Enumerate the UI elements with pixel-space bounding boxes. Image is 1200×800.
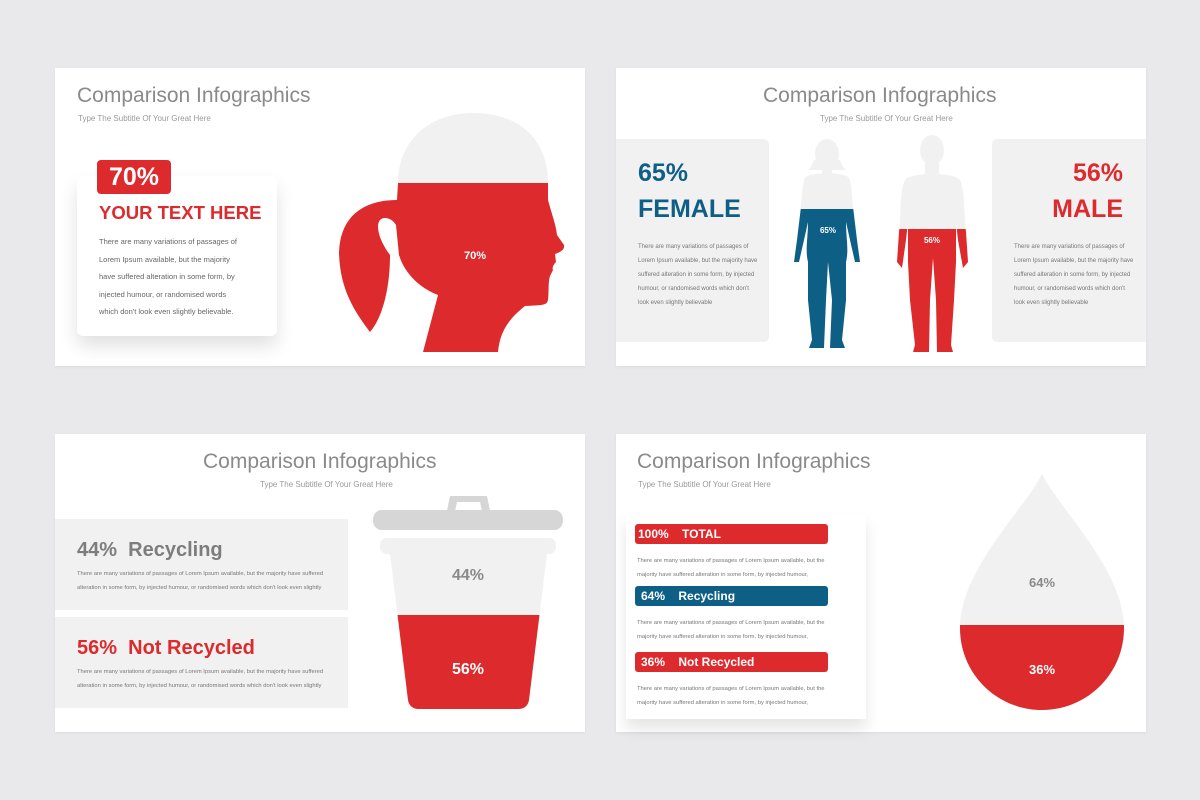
bar: recycling: 64% Recycling — [641, 589, 735, 603]
not recycled heading: 56% Not Recycled — [77, 637, 255, 659]
subtitle: Type The Subtitle Of Your Great Here — [820, 114, 953, 123]
panel: recycling drop — [616, 434, 1146, 732]
badge 70% — [97, 160, 171, 194]
female text: There are many variations of passages of Lorem Ipsum available, but the majority have suffered alteration in some form, by injected humour, or randomised words which don't look even slightly believable — [638, 244, 757, 306]
recycling text: There are many variations of passages of Lorem Ipsum available, but the majority have suffered alteration in some form, by injected humour, or randomised words which don't look even slightly — [77, 571, 323, 591]
graphics layer — [339, 113, 1124, 710]
title: Comparison Infographics — [77, 84, 310, 107]
male card — [992, 139, 1146, 342]
heading: YOUR TEXT HERE — [99, 202, 261, 223]
text card — [77, 176, 277, 336]
text: total: There are many variations of passages of Lorem Ipsum available, but the majority have suffered alteration in some form, by injected humour, — [637, 558, 825, 578]
bar: total — [635, 524, 828, 544]
female percent: 65% — [638, 159, 688, 187]
icon: female figure — [794, 139, 860, 348]
male percent: 56% — [1073, 159, 1123, 187]
drop label 64%: 64% — [1029, 575, 1055, 590]
subtitle: Type The Subtitle Of Your Great Here — [78, 114, 211, 123]
head percent label: 70% — [464, 250, 486, 262]
subtitle: Type The Subtitle Of Your Great Here — [638, 480, 771, 489]
bucket label 56%: 56% — [452, 661, 484, 678]
not recycled text: There are many variations of passages of Lorem Ipsum available, but the majority have suffered alteration in some form, by injected humour, or randomised words which don't look even slightly — [77, 669, 323, 689]
female label: FEMALE — [638, 195, 741, 223]
bar: total: 100% TOTAL — [638, 527, 721, 541]
badge 70%: 70% — [109, 163, 159, 191]
female figure label: 65% — [820, 226, 836, 235]
bar: not recycled — [635, 652, 828, 672]
recycling heading: 44% Recycling — [77, 539, 223, 561]
bucket label 44%: 44% — [452, 567, 484, 584]
icon: head silhouette — [339, 113, 564, 352]
icon: bucket — [373, 496, 563, 709]
male label: MALE — [1052, 195, 1123, 223]
bar: not recycled: 36% Not Recycled — [641, 655, 754, 669]
icon: male figure — [897, 135, 968, 352]
text: recycling: There are many variations of passages of Lorem Ipsum available, but the majority have suffered alteration in some form, by injected humour, — [637, 620, 825, 640]
title: Comparison Infographics — [763, 84, 996, 107]
panel: recycling bucket — [55, 434, 585, 732]
male figure label: 56% — [924, 236, 940, 245]
bar: recycling — [635, 586, 828, 606]
not recycled row — [55, 617, 348, 708]
male text: There are many variations of passages of Lorem Ipsum available, but the majority have suffered alteration in some form, by injected humour, or randomised words which don't look even slightly believable — [1014, 244, 1133, 306]
panel: head comparison — [55, 68, 585, 366]
body text: There are many variations of passages of Lorem Ipsum available, but the majority have suffered alteration in some form, by injected humour, or randomised words which don't look even slightly believable. — [99, 237, 237, 316]
panel: body comparison — [616, 68, 1146, 366]
text: not recycled: There are many variations of passages of Lorem Ipsum available, but the majority have suffered alteration in some form, by injected humour, — [637, 686, 825, 706]
list card — [626, 514, 866, 719]
recycling row — [55, 519, 348, 610]
icon: water drop — [960, 474, 1124, 710]
female card — [616, 139, 769, 342]
drop label 36%: 36% — [1029, 662, 1055, 677]
title: Comparison Infographics — [637, 450, 870, 473]
subtitle: Type The Subtitle Of Your Great Here — [260, 480, 393, 489]
title: Comparison Infographics — [203, 450, 436, 473]
